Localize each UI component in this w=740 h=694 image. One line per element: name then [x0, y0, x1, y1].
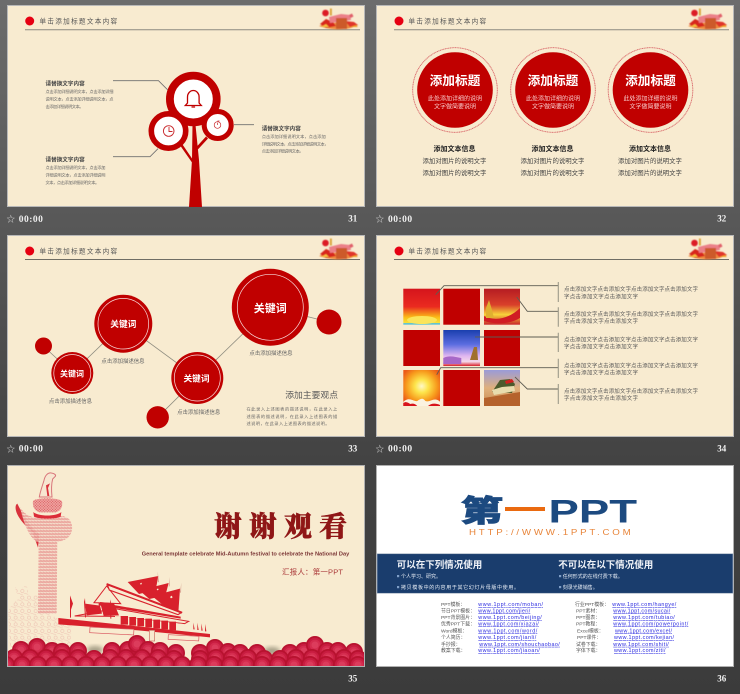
brand logo: HTTP://WWW.1PPT.COM [469, 527, 634, 537]
circle two: 此处添加详细的说明 [526, 94, 580, 102]
photo: Tiananmen illustration [484, 370, 520, 406]
callout: top left [46, 80, 114, 110]
note two: 点击添加文字点击添加文字点击添加文字点击添加文字 [564, 310, 698, 318]
main point text block: 添加主要观点 [285, 389, 338, 400]
link list right: Excel模板： [577, 627, 604, 634]
caption three [618, 144, 682, 177]
main point text block: 在此录入上述图表的描述说明，在此录入上 [246, 406, 337, 413]
note four [564, 362, 698, 377]
note three: 字点击添加文字点击添加文字 [564, 342, 638, 350]
slide 31: tree diagram [8, 6, 364, 207]
slide number 31 footer [6, 214, 358, 225]
header dot [394, 16, 404, 26]
link list right: www.1ppt.com/powerpoint/ [612, 621, 689, 627]
link list left: 手抄报： [441, 641, 461, 648]
callout: top left: 请替换文字内容 [46, 80, 85, 88]
illustration: flowers, huabiao column and gate [8, 473, 210, 649]
callout: bottom left: 文本，点击添加详细说明文本。 [46, 179, 99, 186]
link list right: www.1ppt.com/sucai/ [612, 608, 671, 614]
link list left: PPT模板： [441, 601, 465, 608]
circle two [511, 48, 595, 132]
small dot one [35, 338, 52, 354]
link list right: www.1ppt.com/excel/ [614, 628, 672, 634]
link list right: www.1ppt.com/shiti/ [612, 642, 669, 648]
brand logo [460, 494, 638, 537]
callout: right: 详细说明文本，点击添加详细说明文本， [262, 140, 328, 148]
link list left: www.1ppt.com/beijing/ [477, 615, 542, 621]
bubble one [51, 352, 93, 394]
link list left: www.1ppt.com/xiazai/ [477, 621, 539, 627]
callout: top left: 点击添加详细说明文本，点击添加详细 [46, 88, 114, 95]
slide number 32 footer: ☆ [376, 214, 384, 224]
slide heading: 单击添加标题文本内容 [40, 247, 118, 256]
callout: top left: 说明文本，点击添加详细说明文本，点 [46, 96, 114, 102]
festive logo [319, 8, 358, 29]
link list left [441, 601, 560, 654]
icon: bell [185, 90, 201, 107]
link list left: 优秀PPT下载： [441, 620, 475, 627]
circle two: 文字做简要说明 [532, 102, 574, 110]
link list left: 教案下载： [441, 647, 465, 654]
slide number 34 footer: 00:00 [388, 445, 413, 455]
slide number 31 footer: 00:00 [19, 215, 43, 225]
link list right: PPT素材： [576, 607, 600, 614]
slide number 32 footer [376, 214, 727, 225]
title: 谢谢观看 [214, 505, 354, 545]
link list right: PPT课件： [577, 634, 601, 641]
circle one: 此处添加详细的说明 [428, 94, 482, 102]
allowed uses: 可以在下列情况使用 [397, 559, 482, 571]
main point text block: 述说明，在此录入上述图表的描述说明。 [246, 420, 330, 427]
slide heading: 单击添加标题文本内容 [408, 247, 487, 256]
bubble captions: 点击添加描述信息 [249, 349, 293, 357]
link list right: PPT教程： [576, 620, 600, 627]
right timer circle [204, 112, 231, 138]
note two: 字点击添加文字点击添加文字 [564, 317, 638, 325]
caption three: 添加文本信息 [629, 144, 671, 153]
callout: bottom left: 点击添加详细说明文本，点击添加 [46, 164, 106, 171]
vertical note bars [557, 282, 559, 404]
slide heading: 单击添加标题文本内容 [408, 17, 487, 26]
brand logo: 第 [460, 496, 503, 528]
link list right: PPT图表： [576, 614, 600, 621]
upper roof [94, 586, 121, 604]
note one [564, 285, 698, 300]
link list right: 字体下载： [576, 647, 600, 654]
usage band [377, 554, 733, 593]
link list left: Word模板： [441, 627, 467, 634]
slide number 31 footer: ☆ [6, 214, 16, 224]
left clock circle [151, 114, 186, 148]
header dot [394, 246, 404, 256]
circle two: 添加标题 [528, 73, 579, 88]
caption two [521, 144, 584, 177]
slide 36: brand page [376, 466, 734, 666]
allowed uses: 拷贝模板中的内容用于其它幻灯片母版中使用。 [401, 584, 519, 591]
lamp posts and silhouettes [85, 602, 119, 616]
Tiananmen gate and flags [58, 571, 210, 637]
link list left: www.1ppt.com/jiaoan/ [477, 648, 540, 654]
slide 35: thank you [0, 466, 367, 674]
circle one: 文字做简要说明 [434, 102, 476, 110]
photo: red and yellow sunrise [403, 289, 440, 325]
festive logo [688, 238, 727, 259]
note one: 点击添加文字点击添加文字点击添加文字点击添加文字 [564, 285, 698, 293]
callout: bottom left: 详细说明文本，点击添加详细说明 [46, 172, 106, 178]
slide 34: photo grid with notes [376, 236, 734, 436]
callout: top left: 击添加详细说明文本。 [46, 103, 84, 110]
slide 32: three circles [376, 6, 734, 206]
photo: red banner with gold [484, 289, 520, 325]
main point text block: 述图表的描述说明，在此录入上述图表的描 [246, 413, 337, 420]
icon: timer [214, 121, 221, 128]
forbidden uses: 刻录光碟销售。 [563, 584, 598, 591]
photo: golden sun burst [403, 370, 440, 406]
plaques [90, 627, 199, 641]
circle three [608, 48, 693, 132]
bubble four: 关键词 [254, 301, 287, 315]
slide number 34 footer: ☆ [376, 444, 384, 454]
bubble captions: 点击添加描述信息 [49, 397, 93, 405]
connector lines [43, 307, 329, 417]
wall with arches [115, 616, 183, 631]
caption one: 添加文本信息 [434, 144, 476, 153]
link list left: www.1ppt.com/jieri/ [477, 608, 531, 614]
slide number 34 footer [376, 443, 727, 455]
flower outlines [8, 584, 72, 649]
circle three: 文字做简要说明 [629, 102, 672, 110]
slide number 32 footer: 00:00 [388, 215, 413, 225]
note four: 点击添加文字点击添加文字点击添加文字点击添加文字 [564, 362, 698, 370]
caption three: 添加对图片的说明文字 [618, 168, 682, 177]
connector lines [436, 286, 558, 389]
icon: clock [163, 126, 174, 136]
flags [128, 571, 181, 613]
note two [564, 310, 698, 325]
bubble captions [49, 349, 293, 416]
festive logo [688, 8, 727, 29]
callout: right [262, 125, 328, 154]
link list left: www.1ppt.com/word/ [477, 628, 538, 634]
caption two: 添加文本信息 [532, 144, 574, 153]
brand logo: PPT [548, 494, 638, 530]
slide number 32 footer: 32 [717, 214, 727, 224]
link list left: 个人简历： [441, 634, 465, 641]
slide number 33 footer: 00:00 [19, 445, 43, 455]
note three [564, 335, 698, 350]
note four: 字点击添加文字点击添加文字 [564, 369, 638, 377]
link list left: PPT背景图片： [441, 614, 475, 621]
main point text block [246, 389, 338, 427]
link list left: www.1ppt.com/jianli/ [477, 635, 537, 641]
bubble one: 关键词 [60, 368, 84, 378]
small dot two [316, 310, 342, 334]
slide number 33 footer: 33 [348, 443, 358, 453]
caption three: 添加对图片的说明文字 [618, 156, 682, 165]
slide number 35: 35 [348, 673, 358, 683]
forbidden uses: 不可以在以下情况使用 [558, 559, 653, 571]
bubble captions: 点击添加描述信息 [177, 408, 221, 416]
bubble two [94, 295, 152, 353]
callout: bottom left [46, 156, 106, 186]
circle three: 此处添加详细的说明 [623, 94, 678, 102]
link list right: www.1ppt.com/tubiao/ [612, 615, 675, 621]
lower roof [75, 609, 189, 624]
slide number 33 footer [6, 443, 358, 455]
link list right: www.1ppt.com/kejian/ [613, 635, 674, 641]
slide number 34 footer: 34 [717, 443, 727, 453]
allowed uses: 个人学习、研究。 [401, 573, 441, 580]
slide 33: keyword bubbles [8, 236, 364, 436]
caption two: 添加对图片的说明文字 [521, 168, 584, 177]
bubble two: 关键词 [110, 318, 137, 329]
slide heading: 单击添加标题文本内容 [40, 17, 118, 26]
base band [58, 618, 210, 637]
bubble three: 关键词 [183, 372, 210, 384]
festive logo [319, 238, 358, 259]
callout: right: 点击添加详细说明文本，点击添加 [262, 133, 326, 140]
slide number 33 footer: ☆ [6, 444, 16, 454]
circle one: 添加标题 [430, 73, 481, 88]
forbidden uses: 任何形式的在线付费下载。 [563, 573, 623, 580]
note three: 点击添加文字点击添加文字点击添加文字点击添加文字 [564, 335, 698, 343]
caption one: 添加对图片的说明文字 [423, 168, 486, 177]
huabiao column [16, 473, 72, 614]
large bell circle [170, 76, 217, 122]
photo: blue sky and monument [443, 330, 480, 366]
subtitle: General template celebrate Mid-Autumn festival to celebrate the National Day [142, 552, 350, 558]
link list right: www.1ppt.com/hangye/ [611, 602, 677, 608]
header dot [25, 246, 34, 256]
small dot three [146, 406, 169, 428]
slide number 36: 36 [717, 673, 727, 683]
circle one [413, 48, 497, 132]
callout: right: 点击添加详细说明文本。 [262, 148, 303, 154]
link list right: www.1ppt.com/ziti/ [613, 648, 666, 654]
slide number 31 footer: 31 [348, 214, 358, 224]
note five [564, 387, 698, 402]
link list left: www.1ppt.com/moban/ [477, 602, 544, 608]
callout: bottom left: 请替换文字内容 [46, 156, 85, 164]
header dot [25, 16, 34, 26]
link list right [575, 601, 689, 654]
forbidden uses [558, 559, 653, 591]
link list right: 试卷下载： [576, 641, 600, 648]
circle three: 添加标题 [625, 73, 676, 88]
caption one [423, 144, 486, 177]
callout connector lines [113, 81, 254, 157]
caption one: 添加对图片的说明文字 [423, 156, 486, 165]
bubble captions: 点击添加描述信息 [101, 357, 145, 365]
note five: 字点击添加文字点击添加文字 [564, 394, 638, 402]
allowed uses [397, 559, 519, 591]
link list left: 节日PPT模板： [441, 607, 475, 614]
tree trunk and branches [180, 125, 208, 207]
scallop clouds [8, 635, 364, 666]
image grid [403, 289, 520, 406]
callout: right: 请替换文字内容 [262, 125, 301, 133]
bubble three [171, 352, 223, 404]
note five: 点击添加文字点击添加文字点击添加文字点击添加文字 [564, 387, 698, 395]
link list left: www.1ppt.com/shouchaobao/ [478, 642, 560, 648]
link list right: 行业PPT模板： [575, 601, 609, 608]
caption two: 添加对图片的说明文字 [521, 156, 584, 165]
presenter: 汇报人：第一PPT [282, 566, 343, 576]
note one: 字点击添加文字点击添加文字 [564, 292, 638, 300]
bubble four [232, 269, 309, 346]
